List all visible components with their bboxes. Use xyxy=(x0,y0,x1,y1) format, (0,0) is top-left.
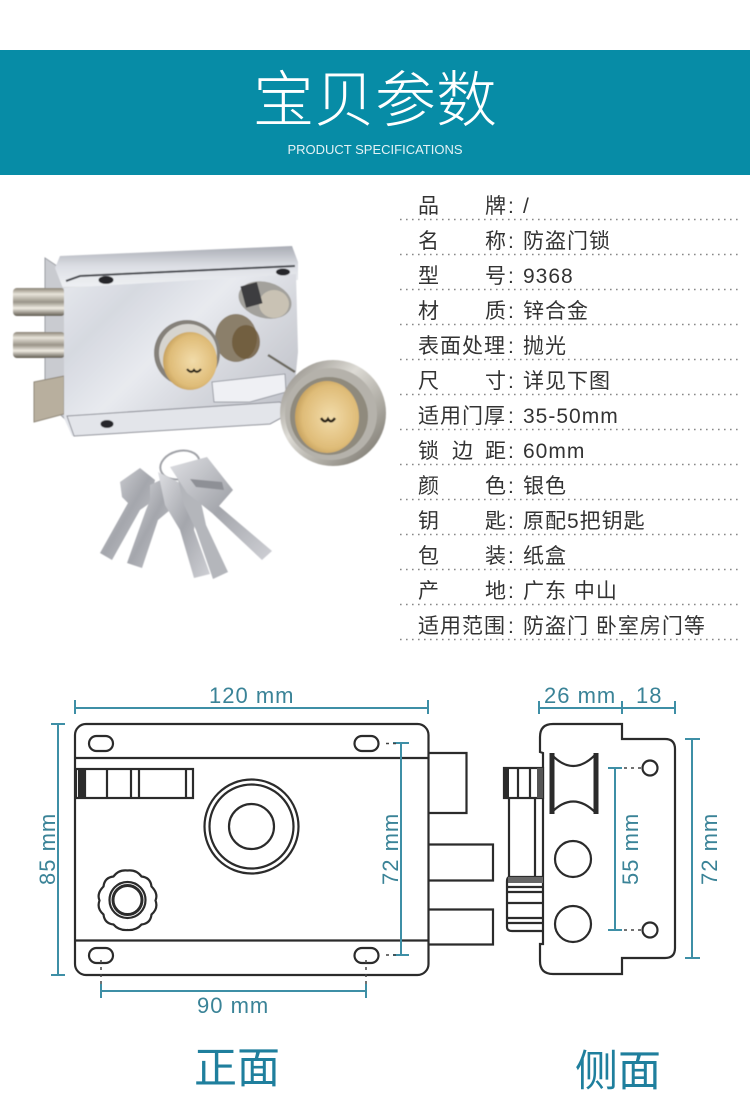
cylinder shaft xyxy=(509,798,535,877)
header banner xyxy=(0,50,750,175)
row: door thickness: 适用门厚 xyxy=(418,405,506,428)
cylinder head xyxy=(504,768,543,798)
mounting slots xyxy=(89,736,378,963)
title: 宝贝参数 xyxy=(253,66,497,134)
row: size xyxy=(418,370,611,393)
row: model: : xyxy=(508,265,515,288)
specification table xyxy=(400,195,740,640)
row: packaging: 纸盒 xyxy=(523,545,567,568)
keys xyxy=(100,446,272,579)
row: brand: : xyxy=(508,195,515,218)
lock body top xyxy=(55,246,298,296)
body outline xyxy=(75,724,428,975)
row: model: 9368 xyxy=(523,265,574,288)
dimension labels xyxy=(35,683,722,1018)
row: keys: 匙 xyxy=(485,510,507,533)
knob xyxy=(99,870,156,930)
pulley xyxy=(551,753,596,814)
row: finish: 表面处理 xyxy=(418,335,506,358)
row: backset: 60mm xyxy=(523,440,585,463)
label 72 mm front: 72 mm xyxy=(378,813,403,885)
row: name xyxy=(418,230,611,253)
row: size: 寸 xyxy=(485,370,507,393)
caption: front: 正面 xyxy=(194,1045,280,1093)
row dividers xyxy=(400,220,740,640)
dimension lines xyxy=(51,700,700,998)
row: material xyxy=(418,300,589,323)
dim 55 mm xyxy=(608,768,622,930)
dim 72 mm side xyxy=(685,739,700,958)
key ring xyxy=(157,446,203,484)
row: material: : xyxy=(508,300,515,323)
label 85 mm: 85 mm xyxy=(35,813,60,885)
row: backset: 锁 xyxy=(418,440,440,463)
row: size: 尺 xyxy=(418,370,440,393)
row: keys: 原配5把钥匙 xyxy=(523,510,646,533)
connecting rod xyxy=(268,355,295,372)
row: keys: 钥 xyxy=(418,510,440,533)
row: brand: / xyxy=(523,195,530,218)
row: origin: 广东 中山 xyxy=(523,580,618,603)
row: name: : xyxy=(508,230,515,253)
row: brand xyxy=(418,195,530,218)
row: scope: : xyxy=(508,615,515,638)
row: model xyxy=(418,265,574,288)
label 55 mm: 55 mm xyxy=(618,813,643,885)
round holes xyxy=(555,760,658,942)
cylinder circles xyxy=(204,780,298,874)
row: door thickness: : xyxy=(508,405,515,428)
row: keys: : xyxy=(508,510,515,533)
key 4 xyxy=(178,480,228,579)
row: finish xyxy=(418,335,567,358)
outer cylinder xyxy=(280,360,386,466)
row: packaging: 装 xyxy=(485,545,507,568)
label 26 mm: 26 mm xyxy=(544,683,616,708)
label 90 mm: 90 mm xyxy=(197,993,269,1018)
leader dashes xyxy=(101,744,642,984)
row: origin xyxy=(418,580,618,603)
lock product photo xyxy=(13,246,386,579)
dim 26 + 18 xyxy=(539,701,675,714)
upper bolt xyxy=(13,288,65,316)
slider xyxy=(76,769,193,798)
row: packaging: : xyxy=(508,545,515,568)
row: name: 防盗门锁 xyxy=(523,230,611,253)
row: size: 详见下图 xyxy=(523,370,611,393)
row: origin: 地 xyxy=(485,580,507,603)
row: colour: : xyxy=(508,475,515,498)
row: finish: : xyxy=(508,335,515,358)
lower plate edge xyxy=(67,402,292,436)
dim 90 mm xyxy=(101,984,366,998)
key 5 xyxy=(170,457,272,560)
row: colour: 颜 xyxy=(418,475,440,498)
row: model: 号 xyxy=(485,265,507,288)
front cylinder xyxy=(154,320,220,390)
row: backset: 边 xyxy=(452,440,474,463)
row: name: 名 xyxy=(418,230,440,253)
screw holes xyxy=(98,268,290,428)
label 120 mm: 120 mm xyxy=(209,683,294,708)
row: material: 质 xyxy=(485,300,507,323)
row: name: 称 xyxy=(485,230,507,253)
row: packaging xyxy=(418,545,567,568)
row: brand: 品 xyxy=(418,195,440,218)
row: brand: 牌 xyxy=(485,195,507,218)
knob side xyxy=(507,877,543,931)
row: colour xyxy=(418,475,567,498)
row: model: 型 xyxy=(418,265,440,288)
row: keys xyxy=(418,510,646,533)
row: backset: 距 xyxy=(485,440,507,463)
rotary knob xyxy=(234,276,296,324)
plate outline xyxy=(540,724,675,974)
side view drawing xyxy=(504,724,675,974)
row: backset: : xyxy=(508,440,515,463)
label 72 mm side: 72 mm xyxy=(697,813,722,885)
key 1 xyxy=(100,468,155,560)
row: finish: 抛光 xyxy=(523,335,567,358)
front view drawing xyxy=(75,724,493,975)
label 18: 18 xyxy=(636,683,662,708)
row: colour: 色 xyxy=(485,475,507,498)
row: door thickness xyxy=(418,405,619,428)
key 5 label mark xyxy=(190,479,224,490)
lock body face xyxy=(64,274,298,436)
bracket behind lock xyxy=(45,258,66,420)
row: material: 锌合金 xyxy=(523,300,589,323)
dark top edge line xyxy=(66,266,295,281)
dim 120 mm xyxy=(75,700,428,714)
row: backset xyxy=(418,440,585,463)
row: material: 材 xyxy=(418,300,440,323)
reflection of handle xyxy=(215,314,260,362)
key 2 xyxy=(127,478,175,568)
plate lines xyxy=(75,758,428,940)
row: origin: 产 xyxy=(418,580,440,603)
dim 85 mm xyxy=(51,724,65,975)
row: packaging: 包 xyxy=(418,545,440,568)
row: origin: : xyxy=(508,580,515,603)
caption: side: 侧面 xyxy=(575,1048,661,1096)
latch xyxy=(34,376,64,422)
row: colour: 银色 xyxy=(523,475,567,498)
subtitle: PRODUCT SPECIFICATIONS xyxy=(287,142,463,157)
dim 72 mm front xyxy=(393,743,409,955)
thumb slider xyxy=(212,374,286,402)
lower bolt xyxy=(13,332,65,358)
row: scope xyxy=(418,615,706,638)
row: scope: 适用范围 xyxy=(418,615,506,638)
row: door thickness: 35-50mm xyxy=(523,405,619,428)
key 3 xyxy=(158,472,210,578)
row: size: : xyxy=(508,370,515,393)
row: scope: 防盗门 卧室房门等 xyxy=(523,615,706,638)
bolts xyxy=(428,753,493,944)
